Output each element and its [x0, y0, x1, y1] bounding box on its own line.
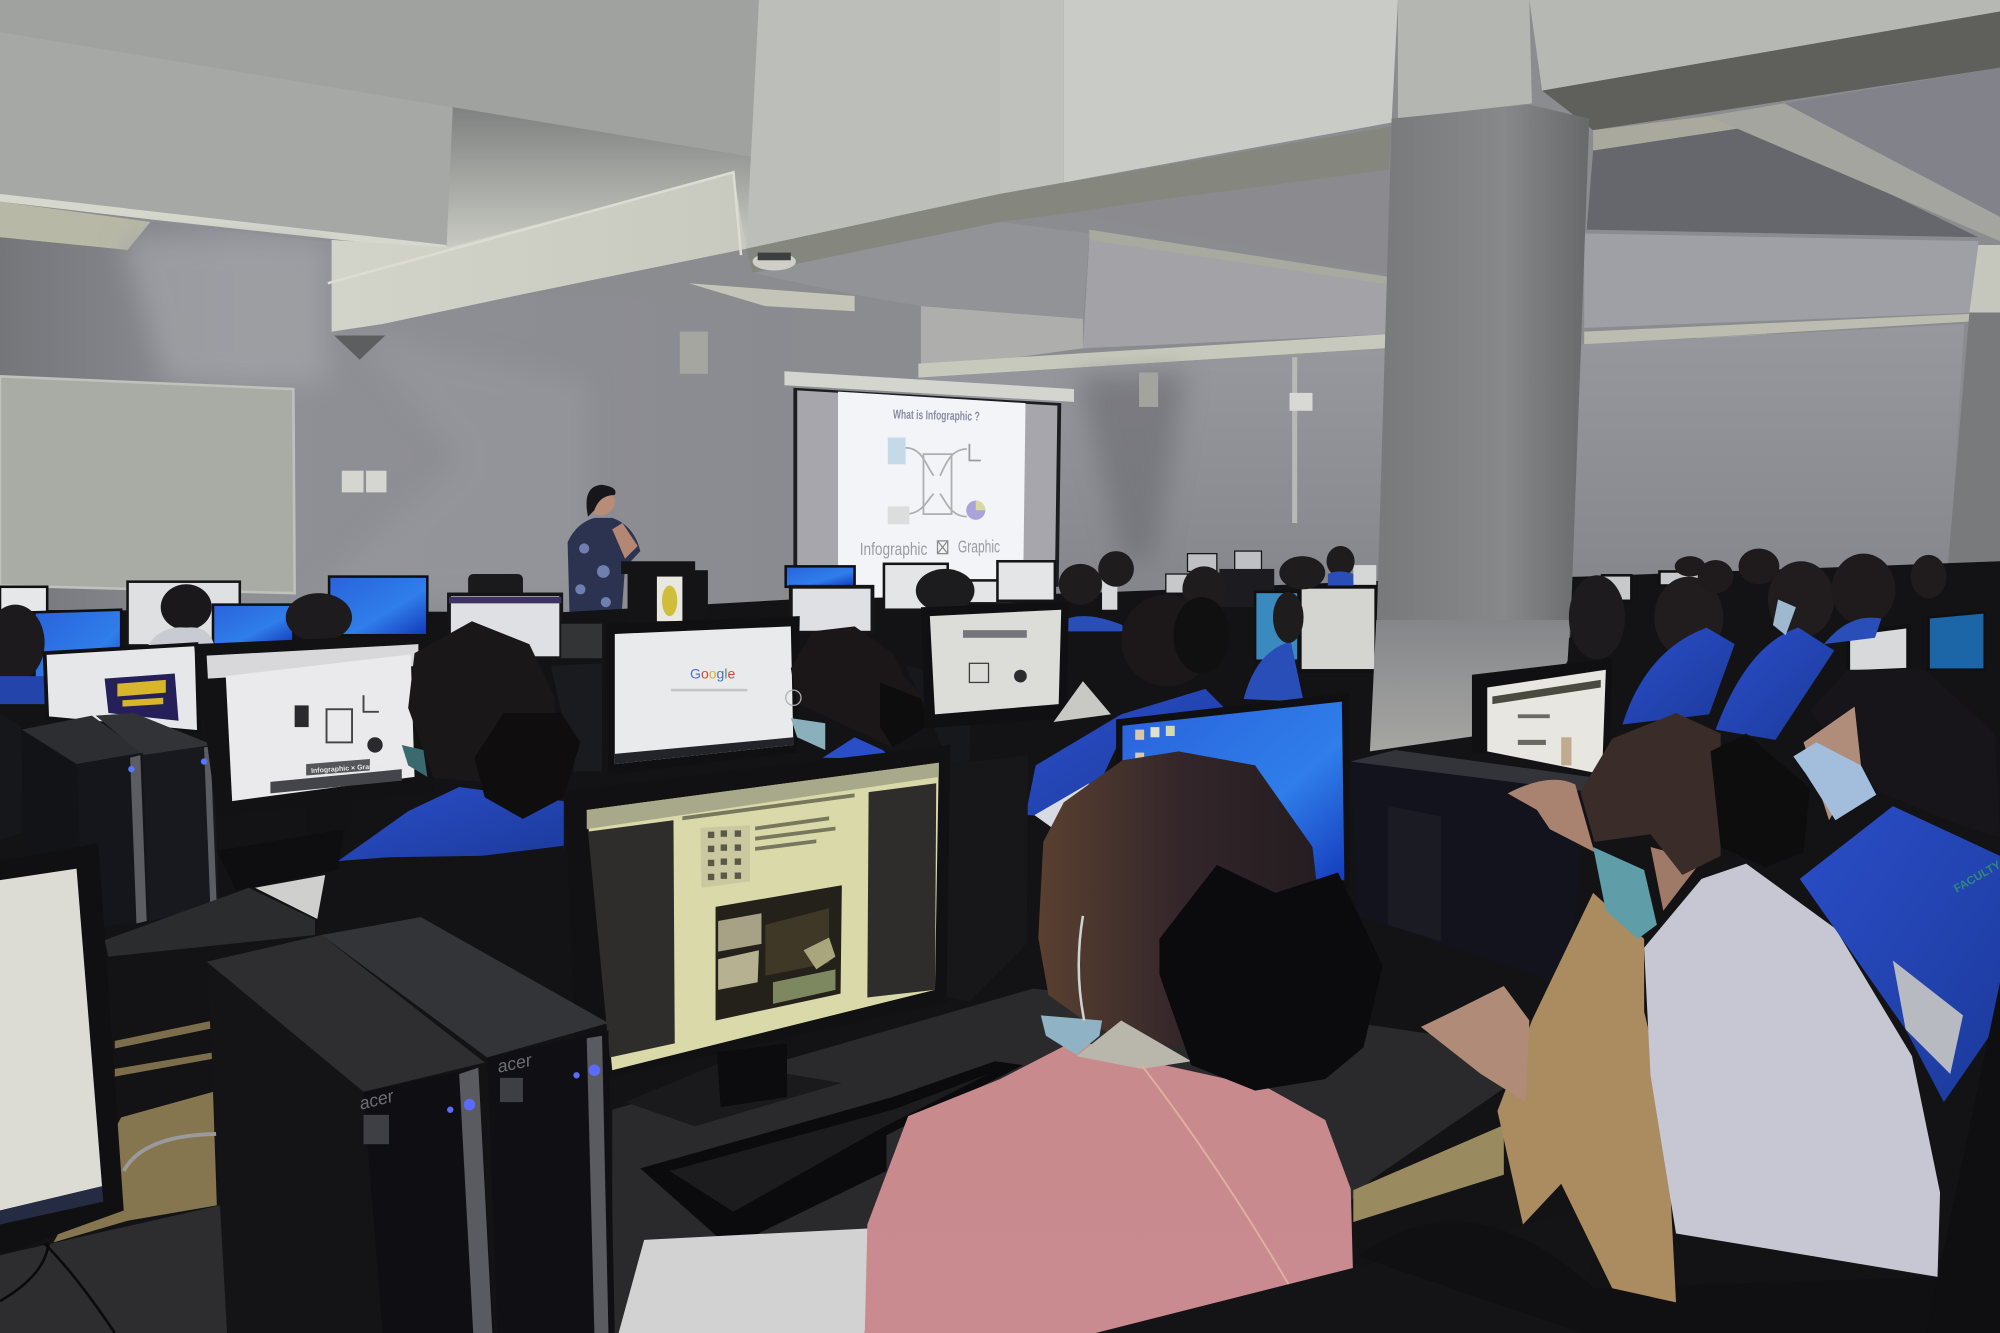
infographic lesson monitor — [194, 634, 434, 839]
on-screen comic illustration — [716, 885, 842, 1020]
white web page monitor — [1472, 658, 1612, 774]
centre tower behind student — [906, 666, 972, 764]
collar — [1077, 1020, 1191, 1069]
monitor with yellow poster — [45, 644, 199, 732]
slide labels on screen — [270, 759, 402, 793]
back left pc towers — [0, 713, 219, 929]
far chair — [468, 574, 523, 600]
front woman in pink — [865, 751, 1383, 1333]
neck — [1651, 847, 1702, 911]
slide labels — [860, 536, 1000, 559]
white shirt — [1644, 864, 1940, 1277]
hair bow right — [1710, 733, 1810, 867]
left wall — [0, 222, 797, 612]
floor stripes — [115, 1020, 213, 1077]
room lower background — [0, 561, 2000, 1333]
hand on mouse — [1421, 986, 1529, 1102]
back left keyboard — [217, 829, 344, 890]
slide labels on screen: Infographic × Graphic — [311, 763, 384, 775]
wall speaker — [680, 332, 708, 374]
back left desk paper — [255, 875, 325, 920]
chair leg — [124, 1134, 217, 1171]
ceiling pipe — [328, 172, 741, 283]
right column upper — [1969, 245, 2000, 313]
front keyboard — [640, 1061, 1023, 1247]
ceiling and beams — [0, 0, 2000, 612]
hair bow — [1159, 865, 1383, 1091]
front desk surface — [612, 989, 1556, 1333]
acer logo left tower: acer — [357, 1086, 397, 1114]
front left pc towers — [207, 917, 615, 1333]
woman far right in blue jacket — [1793, 670, 2000, 1102]
acer logo right tower: acer — [495, 1050, 535, 1077]
monitor stand — [625, 1043, 842, 1126]
student at back centre left — [338, 621, 580, 861]
main column lower part and top — [1370, 0, 1589, 751]
main monitor — [565, 745, 950, 1126]
white lip of left beam — [0, 194, 446, 251]
document monitor — [921, 602, 1069, 728]
blue mask — [1593, 847, 1657, 939]
lower front beam — [332, 174, 746, 332]
on-screen text lines — [682, 793, 855, 851]
slide crossed box icon — [938, 541, 948, 554]
air conditioner unit — [0, 202, 151, 250]
head hair — [1580, 713, 1721, 875]
second wall speaker — [1139, 372, 1158, 407]
blue windows monitor — [1116, 693, 1349, 895]
far row students — [0, 546, 1946, 740]
dark chair middle — [941, 755, 1028, 1001]
projection screen — [784, 371, 1074, 600]
small beam under ceiling — [689, 283, 855, 311]
right wall — [1569, 324, 1964, 600]
google wordmark: Google — [690, 666, 735, 682]
slide labels: Infographic — [860, 539, 927, 559]
poster on screen — [105, 674, 179, 721]
gesturing hand — [1508, 780, 1594, 852]
security camera — [1290, 357, 1312, 523]
face mask — [1041, 916, 1102, 1055]
necklace cord — [1142, 1065, 1295, 1295]
wooden floor left — [54, 1092, 217, 1242]
chair back — [315, 846, 564, 975]
slide labels: Graphic — [958, 536, 1000, 556]
front chair — [1096, 1204, 1606, 1333]
front left monitor — [0, 843, 124, 1255]
hair — [1038, 751, 1327, 1059]
woman in white shirt — [1358, 713, 1940, 1333]
slide title: What is Infographic ? — [893, 406, 980, 424]
back wall — [921, 348, 1385, 600]
back wall shadow — [1078, 372, 1186, 561]
slide diagram — [888, 438, 985, 524]
large right pc tower — [1351, 750, 1589, 986]
google monitor — [606, 616, 800, 774]
on-screen icon chart — [700, 825, 750, 888]
wall thermostat controls — [342, 471, 386, 492]
right column body — [1944, 313, 2000, 612]
blue power led right — [573, 1064, 600, 1078]
back left desk — [105, 888, 315, 957]
student with glasses — [786, 626, 931, 759]
dark lower body — [1358, 1222, 1939, 1333]
far row monitors — [0, 551, 1985, 695]
front paper — [619, 1228, 870, 1333]
wooden floor right — [1353, 1125, 1504, 1222]
desktop icons — [1135, 726, 1175, 763]
left desk front — [0, 1205, 283, 1333]
blue power led left — [447, 1099, 475, 1113]
tan jacket — [1497, 893, 1676, 1302]
student in blue jacket middle — [1026, 594, 1231, 832]
infographic diagram on screen — [295, 695, 383, 753]
whiteboard — [0, 376, 295, 593]
right edge chair — [1926, 982, 2000, 1333]
instructor — [568, 485, 640, 638]
tower behind google monitor — [551, 663, 602, 772]
monitor cable — [0, 1244, 115, 1333]
ceiling dome sensor — [753, 253, 796, 270]
